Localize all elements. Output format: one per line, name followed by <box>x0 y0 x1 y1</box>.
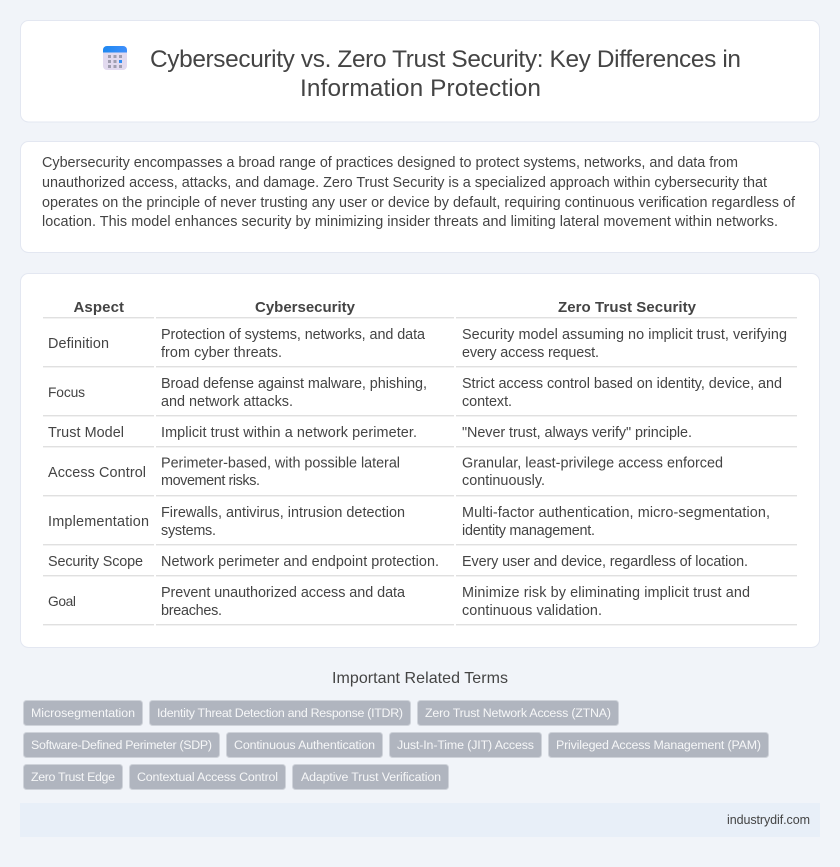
row: definition: every access request. <box>462 345 599 361</box>
title: Information Protection <box>300 75 541 102</box>
row: implementation: systems. <box>161 523 216 539</box>
row: access control: continuously. <box>462 473 545 489</box>
tag: JIT access: Just-In-Time (JIT) Access <box>397 738 534 752</box>
panel: comparison table <box>20 274 820 648</box>
panel: intro text: unauthorized access, attacks, and damage. Zero Trust Security is a specialized approach within cybersecurity that <box>42 175 767 191</box>
row: goal: Goal <box>48 594 76 609</box>
row: focus: Focus <box>48 385 85 400</box>
row: definition: Protection of systems, networks, and data <box>161 327 425 343</box>
row: definition <box>48 327 787 361</box>
tag: zero trust edge <box>24 764 122 790</box>
row: access control: Access Control <box>48 465 146 481</box>
tag: PAM: Privileged Access Management (PAM) <box>556 738 761 752</box>
row: goal: breaches. <box>161 603 222 619</box>
tag: JIT access <box>390 732 542 758</box>
row: implementation: Firewalls, antivirus, intrusion detection <box>161 505 405 521</box>
tag: contextual access control <box>130 764 286 790</box>
icon: calendar grid <box>103 46 127 70</box>
tag: SDP: Software-Defined Perimeter (SDP) <box>31 738 212 752</box>
row: trust model <box>48 425 692 441</box>
panel: header <box>20 20 820 122</box>
row: goal: Minimize risk by eliminating implicit trust and <box>462 585 750 601</box>
row: trust model: Implicit trust within a network perimeter. <box>161 425 417 441</box>
panel: intro text: location. This model enhances security by minimizing insider threats and limiting lateral movement within networks. <box>42 214 778 230</box>
row: definition: Security model assuming no implicit trust, verifying <box>462 327 787 343</box>
row: focus: Broad defense against malware, phishing, <box>161 376 427 392</box>
row: definition: Definition <box>48 336 109 352</box>
tag: ITDR <box>150 700 410 726</box>
row: definition: from cyber threats. <box>161 345 282 361</box>
tag: continuous authentication: Continuous Authentication <box>234 738 375 752</box>
row: implementation: identity management. <box>462 523 595 539</box>
row: focus <box>48 376 782 410</box>
row: implementation: Multi-factor authentication, micro-segmentation, <box>462 505 770 521</box>
tag: continuous authentication <box>226 732 382 758</box>
tag: PAM <box>548 732 768 758</box>
panel: intro text <box>20 142 820 252</box>
row: goal: Prevent unauthorized access and data <box>161 585 405 601</box>
title <box>150 46 741 102</box>
tag: ZTNA <box>418 700 618 726</box>
row: access control: Perimeter-based, with possible lateral <box>161 456 400 472</box>
heading: important related terms: Important Related Terms <box>332 670 508 687</box>
row: focus: Strict access control based on identity, device, and <box>462 376 782 392</box>
row: security scope: Every user and device, regardless of location. <box>462 554 748 570</box>
table rules <box>43 317 797 625</box>
tags: related terms <box>24 700 768 790</box>
tag: microsegmentation: Microsegmentation <box>31 706 135 720</box>
row: access control: movement risks. <box>161 473 260 489</box>
table header row: Cybersecurity <box>255 299 356 316</box>
panel: intro text: Cybersecurity encompasses a broad range of practices designed to protect systems, networks, and data from <box>42 155 738 171</box>
table header row: Zero Trust Security <box>558 299 697 316</box>
table header row <box>74 299 697 316</box>
panel: intro text: operates on the principle of never trusting any user or device by default, requiring continuous verification regardless of <box>42 195 796 211</box>
tag: microsegmentation <box>24 700 142 726</box>
row: implementation: Implementation <box>48 514 149 530</box>
tag: adaptive trust verification <box>292 764 448 790</box>
row: goal: continuous validation. <box>462 603 602 619</box>
row: focus: and network attacks. <box>161 394 293 410</box>
table header row: Aspect <box>74 299 124 316</box>
title: Cybersecurity vs. Zero Trust Security: Key Differences in <box>150 46 741 73</box>
tag: contextual access control: Contextual Access Control <box>137 770 278 784</box>
row: security scope: Network perimeter and endpoint protection. <box>161 554 439 570</box>
tag: SDP <box>24 732 220 758</box>
row: goal <box>48 585 750 619</box>
tag: adaptive trust verification: Adaptive Trust Verification <box>301 770 441 784</box>
tag: zero trust edge: Zero Trust Edge <box>31 770 115 784</box>
row: access control <box>48 456 723 489</box>
tag: ZTNA: Zero Trust Network Access (ZTNA) <box>425 706 611 720</box>
footer <box>20 803 820 837</box>
row: trust model: "Never trust, always verify" principle. <box>462 425 692 441</box>
row: trust model: Trust Model <box>48 425 124 441</box>
row: implementation <box>48 505 770 539</box>
row: security scope: Security Scope <box>48 554 143 570</box>
row: security scope <box>48 554 748 570</box>
tag: ITDR: Identity Threat Detection and Response (ITDR) <box>157 706 403 720</box>
row: focus: context. <box>462 394 512 410</box>
row: access control: Granular, least-privilege access enforced <box>462 456 723 472</box>
footer: industrydif.com <box>727 813 810 827</box>
